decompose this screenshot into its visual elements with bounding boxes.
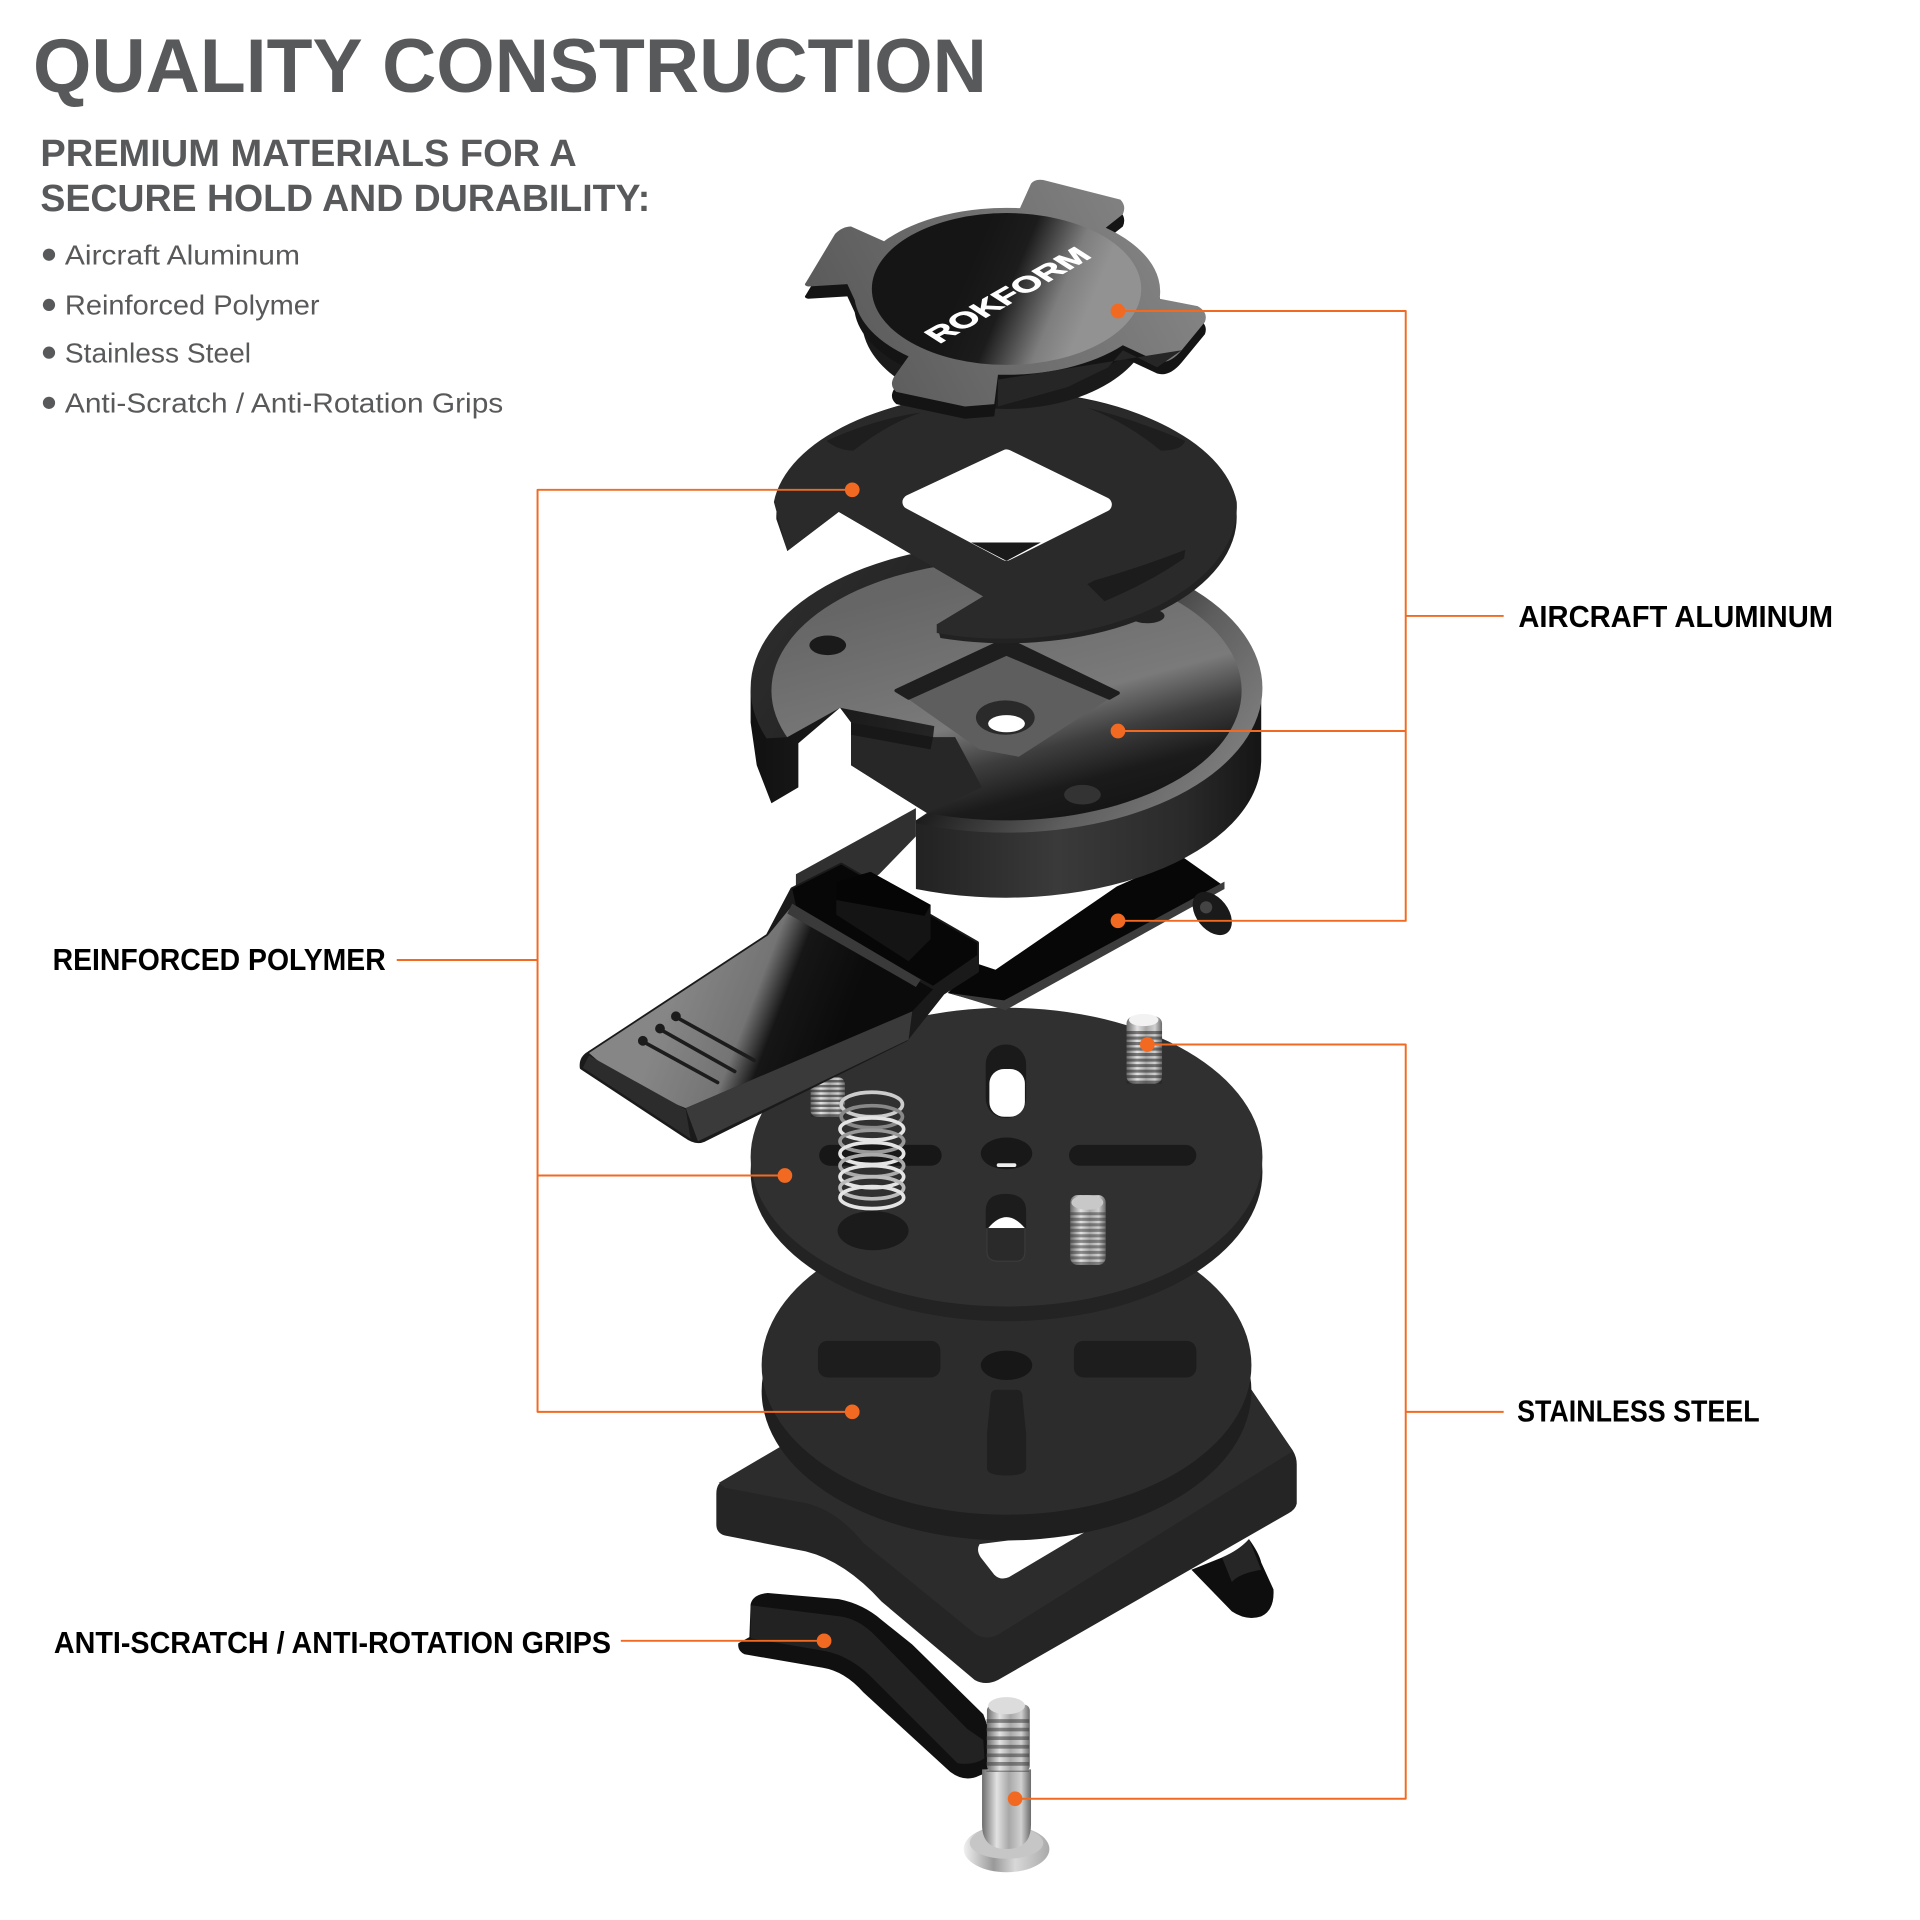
part: latch frame bbox=[796, 808, 1240, 1010]
part: anti-rotation grip bbox=[738, 1593, 992, 1778]
part: polymer washer plate bbox=[774, 391, 1237, 643]
subheading: PREMIUM MATERIALS FOR A bbox=[40, 133, 577, 175]
part: spring bbox=[840, 1092, 904, 1209]
callout: anti-scratch grips: ANTI-SCRATCH / ANTI-ROTATION GRIPS bbox=[54, 1626, 611, 1660]
materials list bbox=[43, 239, 503, 419]
callout: aircraft aluminum bbox=[1111, 304, 1833, 928]
part: base plate bbox=[716, 1390, 1297, 1683]
part: aluminum housing bbox=[751, 544, 1262, 898]
callout: reinforced polymer bbox=[53, 482, 860, 1419]
part: clip lever bbox=[581, 864, 977, 1141]
exploded product diagram bbox=[581, 180, 1297, 1872]
materials list: Stainless Steel bbox=[65, 337, 251, 368]
materials list: Reinforced Polymer bbox=[65, 290, 320, 321]
subheading bbox=[40, 133, 650, 220]
callout: stainless steel bbox=[1008, 1037, 1760, 1806]
callout: stainless steel: STAINLESS STEEL bbox=[1517, 1395, 1760, 1429]
title: QUALITY CONSTRUCTION bbox=[33, 24, 987, 109]
part: right rubber grip bbox=[1191, 1539, 1274, 1618]
part: bottom stainless screw bbox=[964, 1697, 1049, 1872]
callout: aircraft aluminum: AIRCRAFT ALUMINUM bbox=[1518, 600, 1833, 634]
callout: reinforced polymer: REINFORCED POLYMER bbox=[53, 943, 386, 977]
subheading: SECURE HOLD AND DURABILITY: bbox=[40, 178, 650, 220]
part: upper polymer disk bbox=[751, 1008, 1262, 1321]
part: aluminum top cap bbox=[805, 180, 1206, 419]
part: lower polymer disk bbox=[762, 1216, 1251, 1540]
part: stainless threaded pins bbox=[811, 1014, 1162, 1265]
materials list: Anti-Scratch / Anti-Rotation Grips bbox=[65, 388, 503, 419]
materials list: Aircraft Aluminum bbox=[65, 239, 300, 270]
logo: ROKFORM bbox=[918, 243, 1099, 348]
